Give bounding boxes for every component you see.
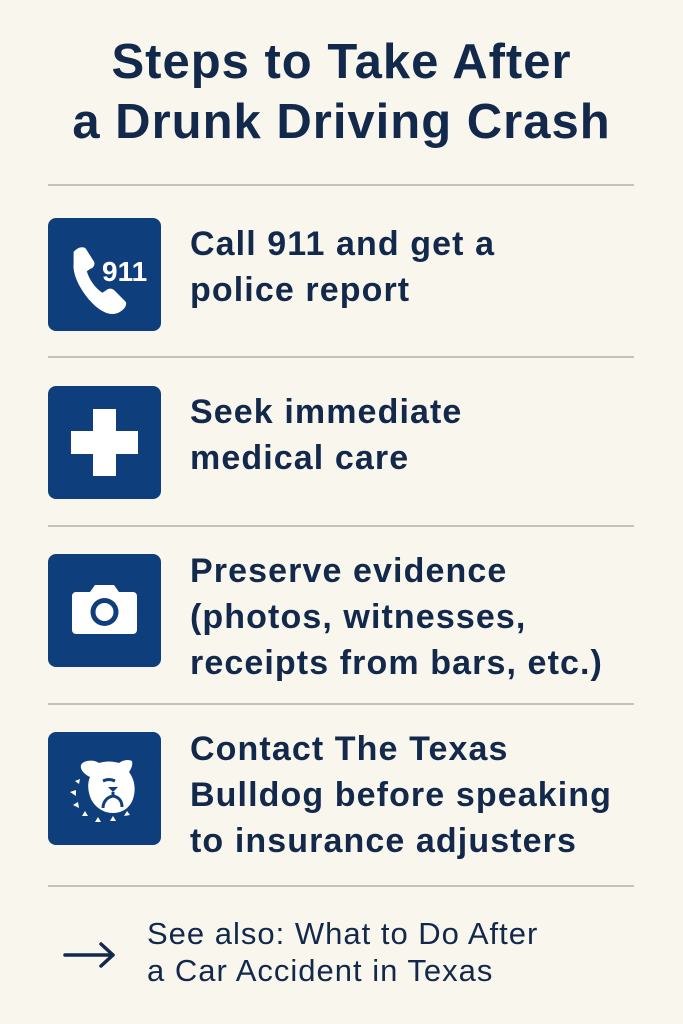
- arrow: [63, 942, 115, 968]
- icon: phone 911: 911: [102, 256, 147, 287]
- step 1 text: Call 911 and get a: [190, 225, 495, 263]
- step 2 text: Seek immediate: [190, 393, 462, 431]
- step 1 text: [190, 225, 495, 309]
- icon: camera: [48, 554, 161, 667]
- icon: bulldog: [48, 732, 161, 845]
- step 3 text: [190, 552, 603, 682]
- title: a Drunk Driving Crash: [72, 95, 611, 149]
- step 4 text: [190, 730, 612, 860]
- icon: medical cross: [48, 386, 161, 499]
- step 2 text: medical care: [190, 439, 409, 477]
- step 2 text: [190, 393, 462, 477]
- see also link: [147, 916, 538, 988]
- title: [72, 35, 611, 149]
- step 4 text: to insurance adjusters: [190, 822, 577, 860]
- step 3 text: (photos, witnesses,: [190, 598, 526, 636]
- see also link: a Car Accident in Texas: [147, 953, 493, 988]
- title: Steps to Take After: [111, 35, 572, 89]
- step 3 text: receipts from bars, etc.): [190, 644, 603, 682]
- see also link: See also: What to Do After: [147, 916, 538, 951]
- step 4 text: Contact The Texas: [190, 730, 508, 768]
- step 3 text: Preserve evidence: [190, 552, 507, 590]
- icon: phone 911: [48, 218, 161, 331]
- step 1 text: police report: [190, 271, 410, 309]
- step 4 text: Bulldog before speaking: [190, 776, 612, 814]
